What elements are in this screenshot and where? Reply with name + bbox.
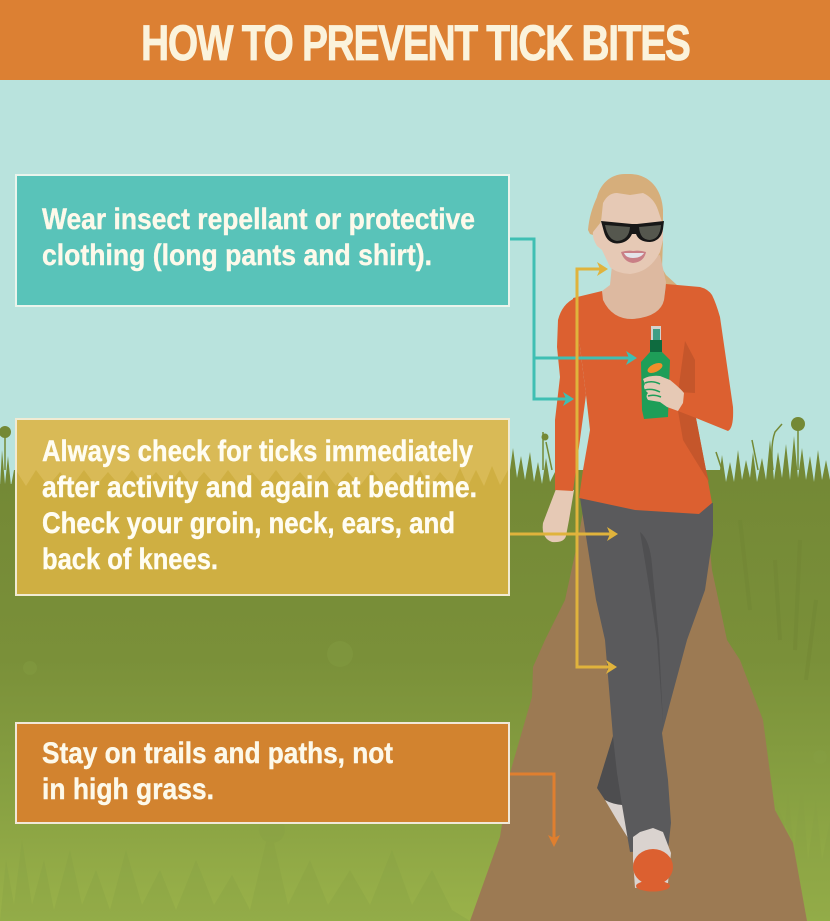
text: stay on trails: Stay on trails and paths, not bbox=[42, 737, 393, 770]
back leg and shoe bbox=[605, 800, 628, 838]
face bbox=[593, 193, 663, 274]
hair bbox=[588, 174, 663, 236]
shoe bbox=[633, 828, 671, 888]
header band bbox=[0, 0, 830, 80]
arrow: tick check locations bbox=[510, 262, 618, 674]
shirt bbox=[573, 284, 733, 514]
text: stay on trails: in high grass. bbox=[42, 773, 214, 806]
right hand bbox=[643, 376, 684, 411]
arrow: repellant to arm and bottle bbox=[510, 239, 637, 406]
text: check for ticks: back of knees. bbox=[42, 543, 218, 576]
text: check for ticks: Always check for ticks immediately bbox=[42, 435, 473, 468]
text: repellant: clothing (long pants and shirt). bbox=[42, 239, 432, 272]
panel: stay on trails bbox=[16, 723, 509, 823]
neck bbox=[602, 255, 666, 319]
left hand bbox=[543, 489, 574, 542]
panel: repellant bbox=[16, 175, 509, 306]
left sleeve bbox=[555, 298, 586, 491]
spray bottle bbox=[641, 326, 670, 419]
pants bbox=[580, 498, 713, 852]
mouth bbox=[621, 251, 646, 263]
grass field bbox=[0, 417, 830, 921]
title: HOW TO PREVENT TICK BITES bbox=[141, 14, 691, 71]
text: check for ticks: Check your groin, neck, ears, and bbox=[42, 507, 455, 540]
text: repellant: Wear insect repellant or protective bbox=[42, 203, 475, 236]
text: check for ticks: after activity and again at bedtime. bbox=[42, 471, 477, 504]
sunglasses bbox=[601, 221, 664, 244]
panel: check for ticks bbox=[16, 419, 509, 595]
arrow: trail bbox=[510, 774, 560, 847]
dirt path bbox=[470, 500, 807, 921]
ponytail bbox=[652, 240, 677, 287]
woman figure bbox=[543, 174, 733, 892]
shirt shading bbox=[678, 341, 709, 482]
